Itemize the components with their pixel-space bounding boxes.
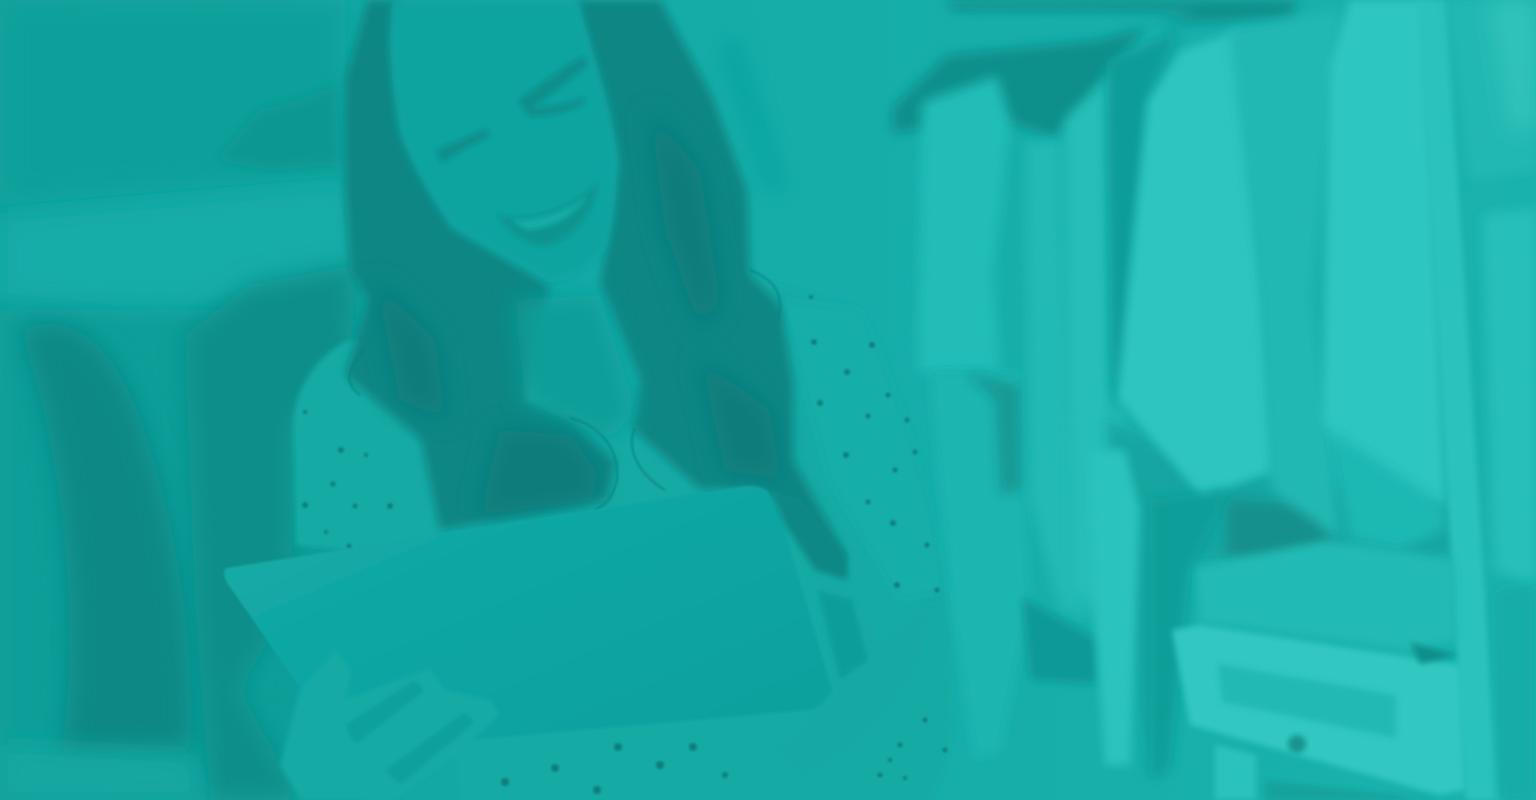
hair curl outline	[349, 270, 780, 510]
wooden ladder shelf	[1418, 0, 1536, 800]
left shelf and dark clothing	[0, 0, 360, 800]
smile	[496, 182, 598, 246]
tablet-side dark hair lock	[770, 490, 848, 580]
blouse body	[293, 280, 953, 800]
right hand	[772, 575, 932, 780]
woman	[224, 0, 953, 800]
rack of blurred clothes	[892, 0, 1453, 780]
tablet	[224, 486, 832, 748]
far wall and post highlight	[720, 40, 785, 195]
drawer unit	[1172, 540, 1465, 800]
hair shadows	[375, 110, 780, 515]
hair: left mass	[345, 0, 615, 530]
left hand	[280, 650, 500, 800]
face	[390, 0, 617, 283]
polka dots on blouse	[302, 295, 948, 794]
neck and chest	[515, 295, 635, 440]
hair: right mass	[575, 0, 846, 575]
eyes and brows	[436, 55, 587, 164]
